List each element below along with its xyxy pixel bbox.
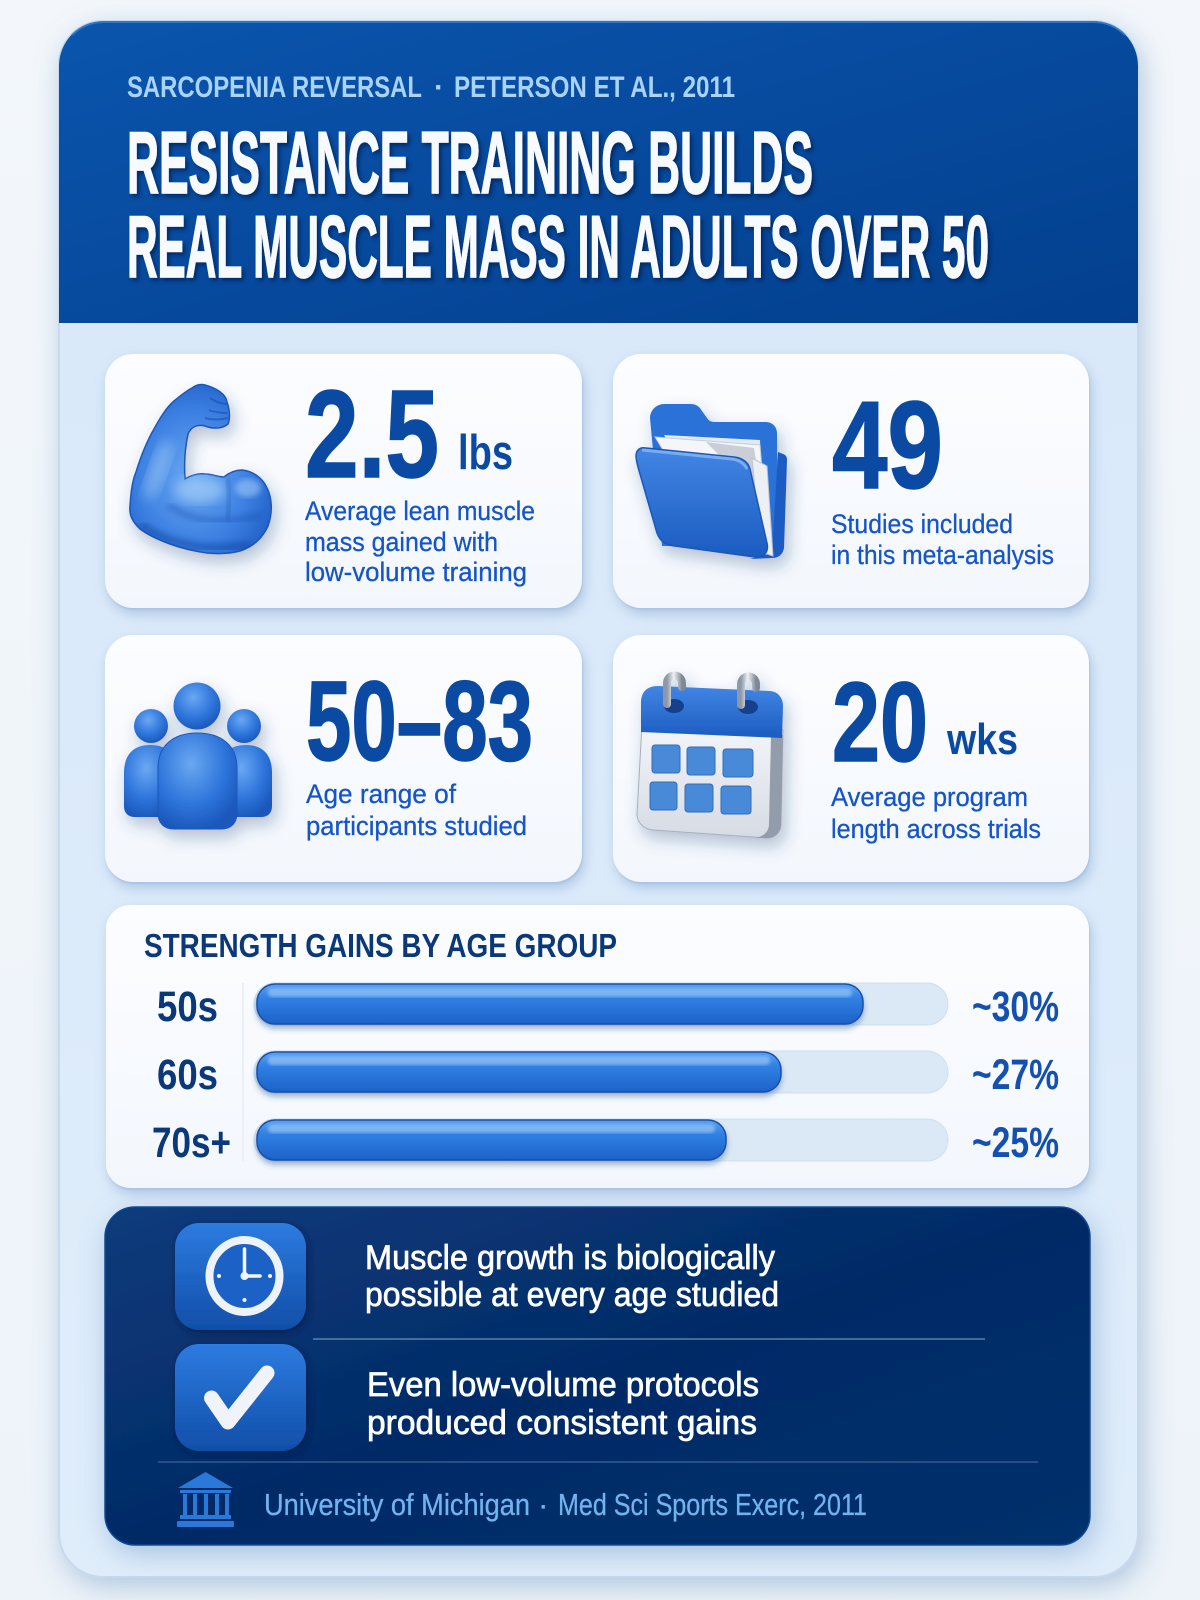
panel: strength gains chart bbox=[106, 905, 1089, 1188]
source citation: University of Michigan bbox=[264, 1487, 530, 1522]
icon: folder bbox=[636, 404, 787, 559]
chart heading: STRENGTH GAINS BY AGE GROUP bbox=[144, 927, 617, 964]
bar row: 60s: 60s bbox=[157, 1051, 218, 1099]
stat description bbox=[305, 496, 535, 587]
stat description: length across trials bbox=[831, 814, 1041, 844]
eyebrow text: · bbox=[434, 71, 444, 104]
stat description: Average lean muscle bbox=[305, 496, 535, 526]
stat description: participants studied bbox=[306, 811, 527, 841]
stat description: mass gained with bbox=[305, 527, 498, 557]
eyebrow text: PETERSON ET AL., 2011 bbox=[454, 71, 735, 104]
panel: stat lean muscle bbox=[105, 354, 582, 608]
stat description: Average program bbox=[831, 782, 1028, 812]
bar row: 70s+: ~25% bbox=[972, 1119, 1059, 1167]
icon: calendar bbox=[637, 676, 783, 838]
bar row: 70s+: 70s+ bbox=[152, 1119, 231, 1167]
bar row: 50s: 50s bbox=[157, 983, 218, 1031]
stat description: low-volume training bbox=[305, 557, 527, 587]
stat description bbox=[831, 782, 1041, 844]
stat value: 20 bbox=[832, 659, 928, 785]
bar row: 50s: ~30% bbox=[972, 983, 1059, 1031]
stat value: 2.5 bbox=[305, 366, 439, 504]
stat description: Studies included bbox=[831, 509, 1013, 539]
takeaway text 2 bbox=[367, 1366, 759, 1442]
source citation: Med Sci Sports Exerc, 2011 bbox=[558, 1487, 867, 1522]
takeaway text 1: possible at every age studied bbox=[365, 1276, 779, 1314]
panel: takeaways bbox=[105, 1207, 1090, 1545]
stat value: 50–83 bbox=[306, 658, 533, 784]
title bbox=[127, 113, 989, 296]
takeaway text 1: Muscle growth is biologically bbox=[365, 1239, 775, 1277]
eyebrow text: SARCOPENIA REVERSAL bbox=[127, 71, 422, 104]
takeaway text 2: produced consistent gains bbox=[367, 1404, 757, 1442]
panel: stat age range bbox=[105, 635, 582, 882]
stat description bbox=[306, 779, 527, 841]
bar row: 50s bbox=[157, 983, 1059, 1031]
stat unit: wks bbox=[946, 715, 1018, 764]
stat value: 49 bbox=[832, 377, 943, 515]
source citation bbox=[264, 1487, 867, 1522]
panel: stat studies bbox=[613, 354, 1089, 608]
eyebrow text bbox=[127, 71, 735, 104]
takeaway text 1 bbox=[365, 1239, 779, 1314]
source citation: · bbox=[538, 1487, 548, 1522]
stat description: in this meta-analysis bbox=[831, 540, 1054, 570]
stat description bbox=[831, 509, 1054, 570]
takeaway text 2: Even low-volume protocols bbox=[367, 1366, 759, 1404]
stat description: Age range of bbox=[306, 779, 456, 809]
icon: institution bbox=[177, 1472, 234, 1527]
icon: check mark bbox=[175, 1344, 306, 1451]
panel: stat program length bbox=[613, 635, 1089, 882]
stat unit: lbs bbox=[458, 426, 513, 480]
bar row: 60s bbox=[157, 1051, 1059, 1099]
icon: flexed arm bbox=[130, 385, 271, 554]
icon: clock bbox=[175, 1223, 306, 1330]
bar row: 70s+ bbox=[152, 1119, 1059, 1167]
panel: header bbox=[59, 21, 1138, 323]
icon: people bbox=[124, 682, 272, 829]
bar row: 60s: ~27% bbox=[972, 1051, 1059, 1099]
